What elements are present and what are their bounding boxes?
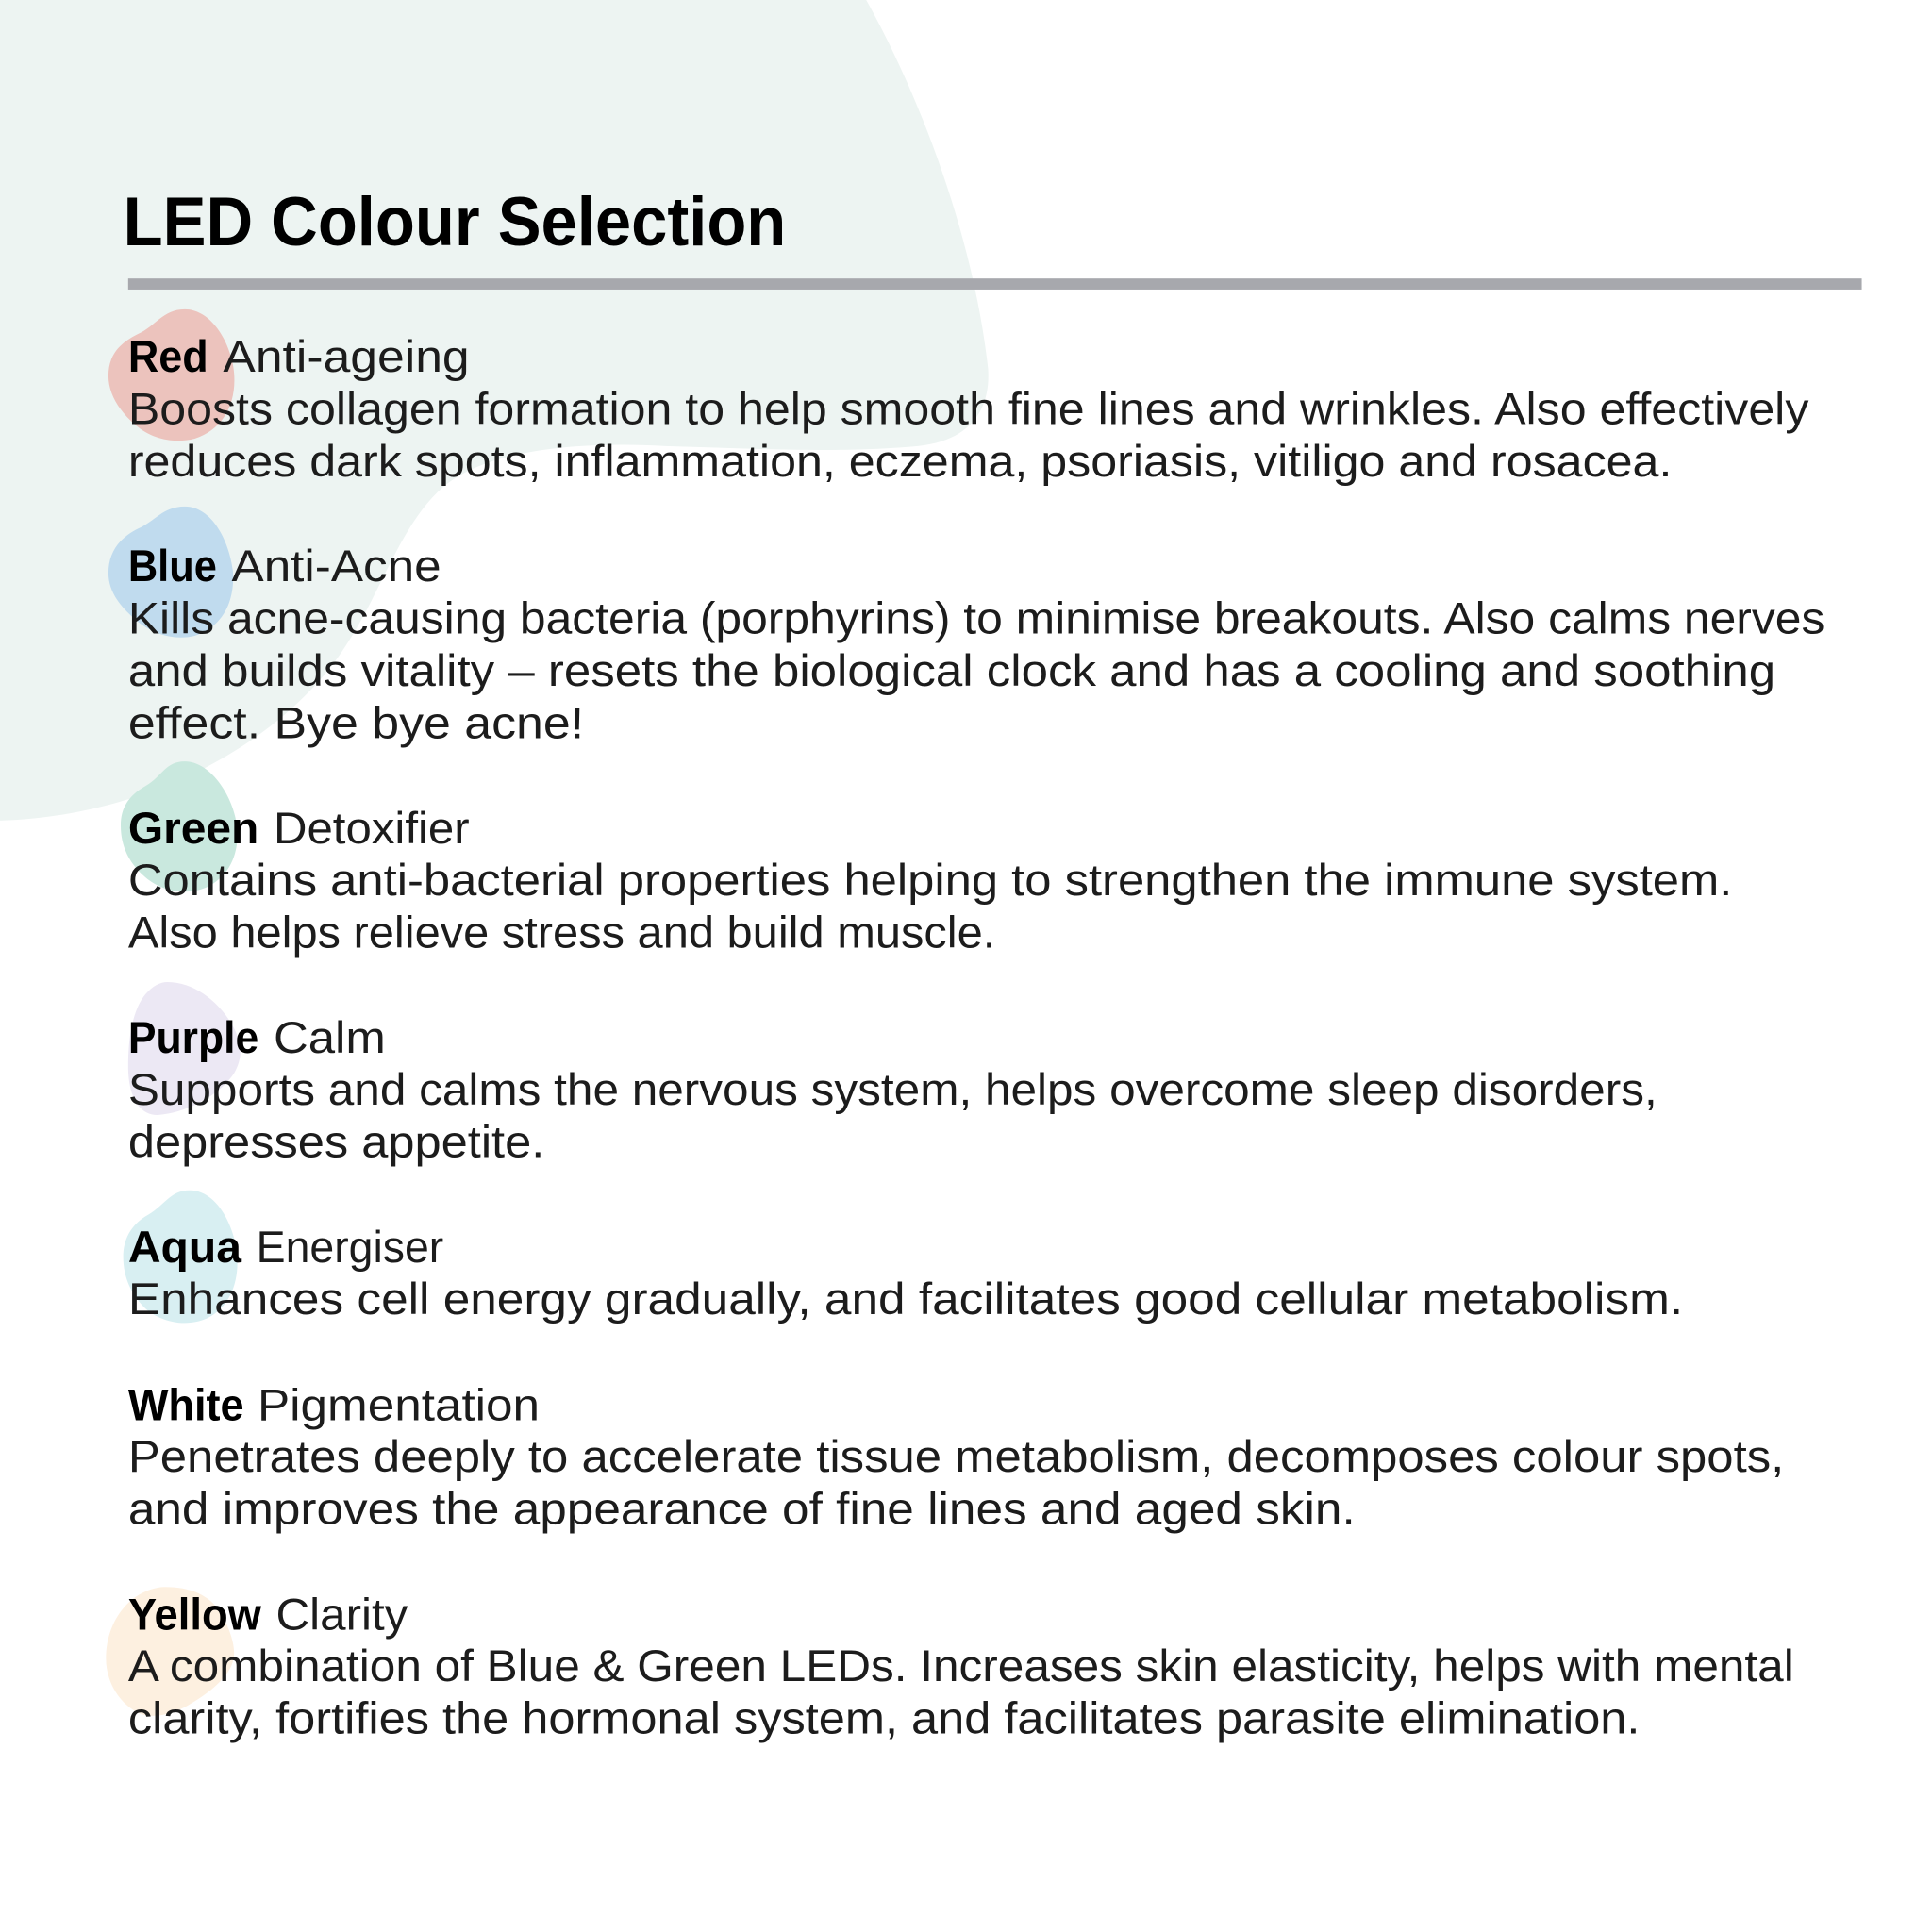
heading: white: White: [128, 1379, 244, 1429]
heading: blue: [128, 541, 441, 591]
icon: red blob: [108, 309, 234, 441]
section: white: [128, 1379, 1784, 1534]
heading: aqua: Energiser: [257, 1222, 443, 1272]
heading: green: [128, 803, 470, 853]
text: white description: [128, 1431, 1784, 1534]
text: yellow description: A combination of Blue & Green LEDs. Increases skin elasticity, helps with mental: [128, 1641, 1794, 1690]
heading: purple: Calm: [274, 1012, 386, 1062]
title rule: [128, 278, 1862, 290]
heading: blue: Anti-Acne: [232, 541, 441, 591]
text: blue description: Kills acne-causing bacteria (porphyrins) to minimise breakouts. Also calms nerves: [128, 592, 1824, 642]
heading: red: Red: [128, 331, 208, 381]
heading: green: Detoxifier: [274, 803, 470, 853]
text: white description: Penetrates deeply to accelerate tissue metabolism, decomposes colour spots,: [128, 1431, 1784, 1481]
heading: purple: Purple: [128, 1012, 258, 1062]
text: green description: Contains anti-bacterial properties helping to strengthen the immune system.: [128, 855, 1732, 905]
icon: aqua blob: [124, 1191, 238, 1323]
heading: white: [128, 1379, 540, 1429]
heading: purple: [128, 1012, 386, 1062]
section: aqua: [124, 1191, 1683, 1324]
text: red description: Boosts collagen formation to help smooth fine lines and wrinkles. Also effectively: [128, 383, 1809, 433]
icon: yellow blob: [106, 1587, 234, 1716]
text: red description: [128, 383, 1809, 486]
heading: red: [128, 331, 470, 381]
text: aqua description: Enhances cell energy gradually, and facilitates good cellular metabolism.: [128, 1274, 1683, 1324]
section: blue: [108, 507, 1824, 747]
text: green description: Also helps relieve stress and build muscle.: [128, 907, 995, 957]
text: white description: and improves the appearance of fine lines and aged skin.: [128, 1484, 1356, 1534]
heading: green: Green: [128, 803, 258, 853]
background blob: [0, 0, 989, 821]
text: green description: [128, 855, 1732, 957]
heading: yellow: [128, 1589, 408, 1639]
heading: aqua: [128, 1222, 443, 1272]
text: purple description: Supports and calms the nervous system, helps overcome sleep disorders,: [128, 1064, 1657, 1114]
heading: blue: Blue: [128, 541, 217, 591]
text: red description: reduces dark spots, inflammation, eczema, psoriasis, vitiligo and rosacea.: [128, 436, 1672, 486]
text: purple description: [128, 1064, 1657, 1166]
section: yellow: [106, 1587, 1794, 1743]
text: purple description: depresses appetite.: [128, 1116, 544, 1166]
icon: green blob: [121, 761, 238, 891]
heading: white: Pigmentation: [258, 1379, 540, 1429]
text: yellow description: [128, 1641, 1794, 1743]
section: purple: [128, 982, 1657, 1166]
heading: yellow: Yellow: [128, 1589, 261, 1639]
text: yellow description: clarity, fortifies the hormonal system, and facilitates parasite elimination.: [128, 1693, 1640, 1743]
text: blue description: effect. Bye bye acne!: [128, 697, 584, 747]
section: red: [108, 309, 1809, 486]
text: blue description: [128, 592, 1824, 747]
heading: yellow: Clarity: [276, 1589, 408, 1639]
heading: red: Anti-ageing: [223, 331, 470, 381]
heading: aqua: Aqua: [128, 1222, 242, 1272]
icon: purple blob: [128, 982, 241, 1115]
section: green: [121, 761, 1732, 957]
icon: blue blob: [108, 507, 233, 638]
title: LED Colour Selection: [124, 184, 786, 260]
text: blue description: and builds vitality – resets the biological clock and has a cooling and soothing: [128, 645, 1775, 695]
